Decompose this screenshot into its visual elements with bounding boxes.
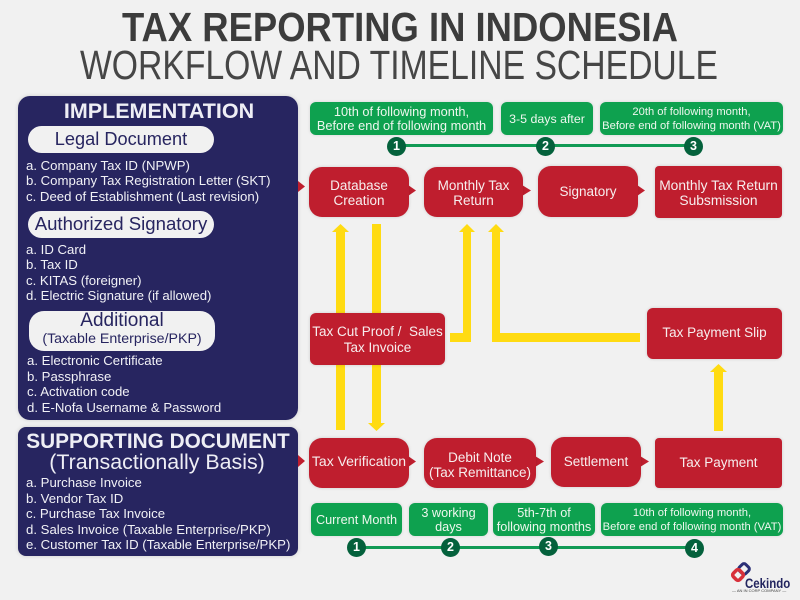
box: database creation — [309, 167, 409, 217]
list: supporting document: a. Purchase Invoice — [26, 475, 142, 490]
box: tax payment: Tax Payment — [679, 454, 758, 470]
step 2 top — [536, 137, 555, 156]
list: supporting document: e. Customer Tax ID (Taxable Enterprise/PKP) — [26, 537, 290, 552]
box: debit note: Debit Note — [448, 450, 512, 464]
list: authorized signatory: d. Electric Signature (if allowed) — [26, 288, 211, 303]
pointer: supporting to verification — [298, 455, 305, 467]
green label: top 3: Before end of following month (VAT) — [602, 120, 781, 132]
supporting document subheading: (Transactionally Basis) — [49, 450, 265, 474]
green label: top 1: Before end of following month — [317, 118, 486, 132]
box: tax verification — [309, 438, 409, 488]
list: authorized signatory: a. ID Card — [26, 242, 86, 256]
step 2 top: 2 — [542, 139, 549, 153]
list: legal document — [26, 158, 271, 204]
pill: legal document — [28, 126, 214, 153]
list: authorized signatory: c. KITAS (foreigner) — [26, 273, 142, 288]
green label: top 1 — [310, 102, 493, 135]
pointer: database to monthly — [408, 185, 416, 196]
step 1 bottom: 1 — [353, 540, 360, 554]
list: authorized signatory: b. Tax ID — [26, 257, 78, 272]
green label: bottom 3: 5th-7th of — [517, 506, 571, 520]
box: settlement — [551, 437, 641, 487]
list: supporting document: c. Purchase Tax Invoice — [26, 506, 165, 521]
step 2 bottom — [441, 538, 460, 557]
pointer: debit to settlement — [535, 456, 544, 467]
pill: additional — [29, 311, 215, 351]
green label: top 1: 10th of following month, — [334, 104, 469, 118]
box: monthly tax return: Return — [453, 193, 494, 208]
box: tax cut proof: Tax Invoice — [344, 340, 411, 354]
pointer: implementation to database — [298, 181, 305, 192]
box: database creation: Creation — [333, 193, 384, 208]
step 4 bottom: 4 — [691, 541, 698, 555]
list: legal document: a. Company Tax ID (NPWP) — [26, 158, 190, 172]
box: settlement: Settlement — [564, 454, 628, 469]
pill: legal document: Legal Document — [55, 129, 187, 149]
timeline line top — [396, 144, 694, 147]
box: monthly tax return — [424, 167, 523, 217]
pill: authorized signatory: Authorized Signatory — [35, 213, 207, 234]
green label: bottom 2: 3 working — [421, 506, 476, 520]
step 1 bottom — [347, 538, 366, 557]
step 3 top: 3 — [690, 139, 697, 153]
list: additional: b. Passphrase — [27, 369, 111, 384]
box: signatory — [538, 166, 638, 217]
pointer: settlement to tax payment — [640, 456, 649, 467]
timeline line bottom — [356, 546, 694, 549]
supporting document heading: SUPPORTING DOCUMENT — [26, 430, 290, 453]
box: tax verification: Tax Verification — [312, 452, 406, 468]
green label: bottom 2: days — [435, 520, 462, 534]
green label: top 2 — [501, 102, 593, 135]
box: tax cut proof: Tax Cut Proof / Sales — [312, 324, 443, 338]
box: monthly tax return: Monthly Tax — [438, 178, 509, 193]
title — [80, 4, 718, 88]
step 1 top — [387, 137, 406, 156]
list: additional: a. Electronic Certificate — [27, 353, 163, 368]
arrow: up to monthly tax return, from tax cut proof — [450, 224, 475, 342]
list: additional: c. Activation code — [27, 384, 130, 399]
green label: bottom 4 — [601, 503, 783, 536]
green label: bottom 1 — [311, 503, 402, 536]
step 2 bottom: 2 — [447, 540, 454, 554]
step 3 top — [684, 137, 703, 156]
box: tax payment — [655, 438, 782, 488]
green label: bottom 4: 10th of following month, — [633, 506, 751, 518]
green label: bottom 2 — [409, 503, 488, 536]
logo text: Cekindo — [745, 576, 790, 591]
list: additional — [27, 353, 221, 415]
step 3 bottom: 3 — [545, 539, 552, 553]
arrow: up to tax payment slip — [710, 364, 727, 431]
green label: top 2: 3-5 days after — [509, 112, 585, 126]
list: supporting document: b. Vendor Tax ID — [26, 491, 123, 506]
box: debit note: (Tax Remittance) — [429, 464, 531, 480]
step 4 bottom — [685, 539, 704, 558]
green label: bottom 3 — [493, 503, 595, 536]
green label: bottom 4: Before end of following month (VAT) — [603, 520, 781, 532]
pointer: monthly to signatory — [522, 185, 531, 196]
box: debit note — [424, 438, 536, 488]
box: monthly tax return submission: Monthly Tax Return — [659, 178, 778, 192]
pill: additional: Additional — [80, 310, 164, 331]
arrow: up to monthly tax return, from payment slip — [488, 224, 640, 342]
list: legal document: b. Company Tax Registration Letter (SKT) — [26, 173, 271, 188]
arrow: down to tax verification — [368, 224, 385, 431]
list: supporting document: d. Sales Invoice (Taxable Enterprise/PKP) — [26, 522, 271, 537]
list: legal document: c. Deed of Establishment (Last revision) — [26, 189, 259, 204]
logo tagline: — AN IN CORP COMPANY — — [732, 588, 786, 593]
box: tax payment slip — [647, 308, 782, 359]
step 3 bottom — [539, 537, 558, 556]
box: monthly tax return submission: Subsmission — [679, 192, 758, 208]
green label: bottom 1: Current Month — [316, 512, 397, 526]
box: signatory: Signatory — [559, 184, 617, 199]
list: authorized signatory — [26, 242, 211, 303]
green label: top 3 — [600, 102, 783, 135]
list: supporting document — [26, 475, 290, 552]
title line 1: TAX REPORTING IN INDONESIA — [122, 4, 678, 50]
pill: additional: (Taxable Enterprise/PKP) — [42, 331, 202, 347]
box: tax payment slip: Tax Payment Slip — [662, 325, 767, 340]
green label: bottom 3: following months — [497, 520, 591, 534]
box: database creation: Database — [330, 178, 388, 193]
panel: supporting document — [18, 427, 298, 556]
panel: implementation — [18, 96, 298, 420]
logo: cekindo — [730, 562, 790, 593]
arrow: up to database creation — [332, 224, 349, 430]
list: additional: d. E-Nofa Username & Password — [27, 400, 221, 415]
green label: top 3: 20th of following month, — [632, 106, 751, 118]
pointer: signatory to submission — [637, 185, 645, 196]
box: tax cut proof — [310, 313, 445, 365]
box: monthly tax return submission — [655, 166, 782, 218]
pointer: verification to debit — [408, 456, 416, 467]
implementation heading: IMPLEMENTATION — [64, 99, 254, 123]
icon: logo mark — [730, 562, 751, 582]
step 1 top: 1 — [393, 139, 400, 153]
